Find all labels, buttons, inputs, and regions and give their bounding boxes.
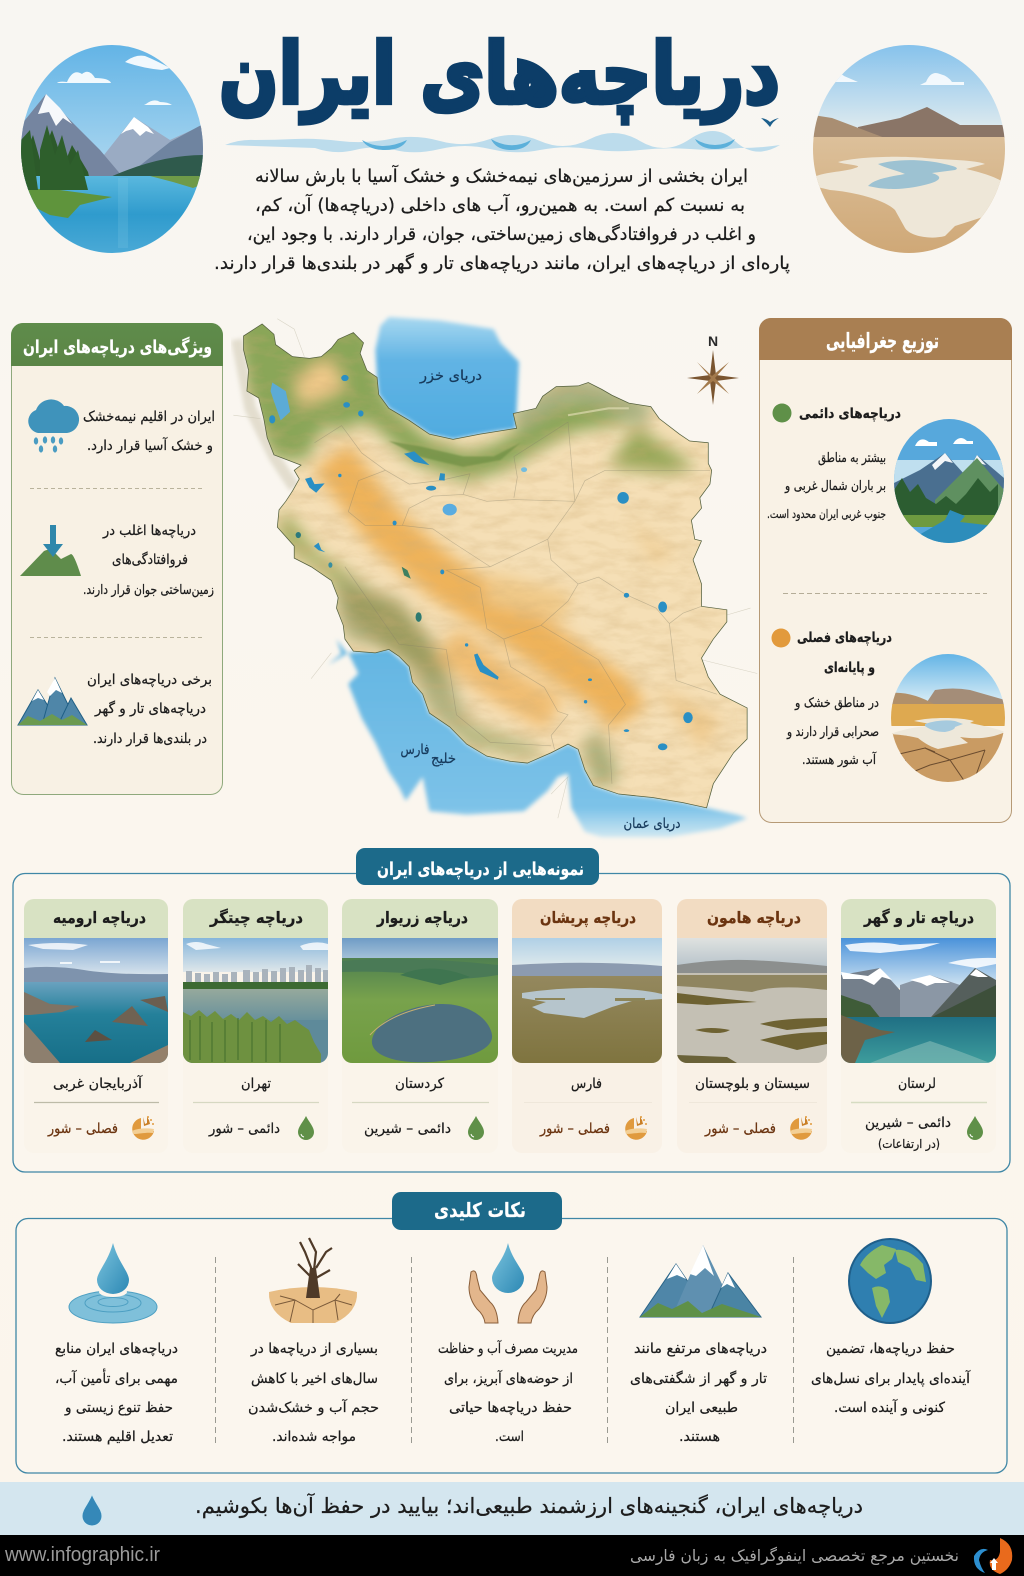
title: دریاچه‌های ایران xyxy=(219,25,780,124)
legend: permanent lakes: دریاچه‌های دائمی xyxy=(799,406,901,422)
card: Chitgar: دریاچه چیتگر xyxy=(209,908,303,928)
key point: sustainable future: حفظ دریاچه‌ها، تضمین xyxy=(826,1341,955,1357)
card: Chitgar: دائمی – شور xyxy=(208,1121,280,1137)
card: Tar and Gahar: دائمی – شیرین xyxy=(865,1115,951,1131)
icon: compass rose xyxy=(687,333,739,405)
card: Hamoon: دریاچه هامون xyxy=(707,908,801,928)
key point: water resources xyxy=(55,1243,178,1445)
key point: shrinking lakes: مواجه شده‌اند. xyxy=(272,1429,356,1445)
text: tectonic xyxy=(83,523,214,598)
intro paragraph: و اغلب در فروافتادگی‌های زمین‌ساختی، جوان، قرار دارند. با وجود این، xyxy=(247,223,756,245)
key point: sustainable future: کنونی و آینده است. xyxy=(834,1399,945,1416)
text: permanent lakes: بر باران شمال غربی و xyxy=(784,479,886,494)
key point: highland lakes: تار و گهر از شگفتی‌های xyxy=(630,1370,767,1387)
illustration: seasonal lake xyxy=(891,654,1005,782)
Persian Gulf and Sea of Oman xyxy=(328,639,747,837)
footer tagline: نخستین مرجع تخصصی اینفوگرافیک به زبان فارسی xyxy=(630,1546,959,1566)
card: Zarivar: دائمی – شیرین xyxy=(364,1121,451,1137)
key point: water management: مدیریت مصرف آب و حفاظت xyxy=(438,1340,578,1357)
text: seasonal lakes: صحرابی قرار دارند و xyxy=(786,725,879,740)
intro paragraph: پاره‌ای از دریاچه‌های ایران، مانند دریاچه‌های تار و گهر در بلندی‌ها قرار دارند. xyxy=(214,252,790,274)
closing banner xyxy=(0,1482,1024,1535)
country border xyxy=(244,324,747,808)
key point: water management: حفظ دریاچه‌ها حیاتی xyxy=(449,1400,572,1416)
section heading: key points: نکات کلیدی xyxy=(434,1198,526,1222)
icon: mountains xyxy=(18,678,87,725)
text: seasonal lakes: در مناطق خشک و xyxy=(794,696,879,711)
icon: dead tree on cracked ground xyxy=(269,1238,357,1323)
key point: sustainable future xyxy=(811,1239,971,1416)
panel: geographic distribution xyxy=(759,318,1012,822)
card: Urmia: فصلی – شور xyxy=(47,1121,118,1137)
legend: permanent lakes xyxy=(772,404,901,422)
text: highlands: برخی دریاچه‌های ایران xyxy=(87,672,212,688)
key point: shrinking lakes: سال‌های اخیر با کاهش xyxy=(251,1371,378,1387)
key point: water management xyxy=(438,1243,578,1445)
footer website: www.infographic.ir xyxy=(4,1544,160,1566)
text: tectonic: زمین‌ساختی جوان قرار دارند. xyxy=(83,583,214,598)
card: Tar and Gahar: لرستان xyxy=(898,1076,936,1092)
card: Parishan xyxy=(512,899,662,1153)
legend: seasonal lakes: دریاچه‌های فصلی xyxy=(797,630,892,646)
decorative wave under title xyxy=(225,131,780,152)
map of Iran xyxy=(230,305,771,856)
key point: water resources: تعدیل اقلیم هستند. xyxy=(62,1429,173,1445)
illustration: permanent lake xyxy=(894,419,1004,543)
card: Hamoon xyxy=(677,899,827,1153)
icon: earth globe xyxy=(849,1239,931,1323)
icon: rain cloud xyxy=(28,399,79,453)
illustration: dry salt lake xyxy=(813,45,1005,253)
key point: water management: از حوضه‌های آبریز، برای xyxy=(444,1370,573,1387)
text: climate: ایران در اقلیم نیمه‌خشک xyxy=(83,409,215,425)
intro paragraph: ایران بخشی از سرزمین‌های نیمه‌خشک و خشک آسیا با بارش سالانه xyxy=(255,164,748,187)
text: highlands: در بلندی‌ها قرار دارند. xyxy=(93,731,207,747)
section heading: lake examples: نمونه‌هایی از دریاچه‌های ایران xyxy=(377,859,584,880)
footer logo xyxy=(974,1538,1012,1574)
card: Parishan: دریاچه پریشان xyxy=(540,908,636,928)
text: climate xyxy=(83,409,215,454)
card: Hamoon: سیستان و بلوچستان xyxy=(695,1076,810,1092)
text: highlands: دریاچه‌های تار و گهر xyxy=(94,700,206,717)
intro paragraph: به نسبت کم است. به همین‌رو، آب های داخلی (دریاچه‌ها) آن، کم، xyxy=(255,193,745,216)
icon: hands holding drop xyxy=(469,1243,547,1323)
text: seasonal lakes xyxy=(786,696,879,768)
map label: Caspian Sea: دریای خزر xyxy=(419,368,482,384)
icon: depression arrow xyxy=(20,525,81,576)
icon: compass rose: N xyxy=(708,333,718,349)
text: permanent lakes: جنوب غربی ایران محدود است. xyxy=(767,507,886,522)
illustration: mountain lake xyxy=(21,45,203,253)
card: Parishan: فارس xyxy=(571,1076,602,1092)
icon: drop with ripples xyxy=(69,1243,157,1323)
key point: shrinking lakes: حجم آب و خشک‌شدن xyxy=(248,1399,379,1416)
section heading: lake examples xyxy=(356,848,599,885)
panel header: lake features xyxy=(11,323,223,366)
lakes xyxy=(269,375,693,750)
panel header: geographic distribution xyxy=(759,318,1012,360)
footer bar xyxy=(0,1535,1024,1576)
panel header: lake features: ویژگی‌های دریاچه‌های ایران xyxy=(23,336,212,358)
key point: water management: است. xyxy=(495,1429,524,1445)
key point: sustainable future: آینده‌ای پایدار برای نسل‌های xyxy=(811,1370,971,1387)
section frame: lake examples xyxy=(13,848,1010,1172)
card: Tar and Gahar: (در ارتفاعات) xyxy=(878,1137,940,1152)
key point: highland lakes: دریاچه‌های مرتفع مانند xyxy=(634,1341,767,1357)
map label: Sea of Oman: دریای عمان xyxy=(624,816,680,832)
map label: Persian Gulf, Khalij: خلیج xyxy=(431,751,456,767)
card: Parishan: فصلی – شور xyxy=(539,1121,610,1137)
legend: seasonal lakes: و پایانه‌ای xyxy=(824,660,875,676)
icon: water drop xyxy=(82,1494,102,1526)
icon: snowy mountains xyxy=(640,1245,761,1317)
intro paragraph xyxy=(214,164,790,274)
panel header: geographic distribution: توزیع جغرافیایی xyxy=(826,329,939,353)
card: Zarivar: کردستان xyxy=(395,1076,444,1092)
section frame: key points xyxy=(16,1192,1007,1473)
key point: highland lakes: هستند. xyxy=(679,1429,720,1445)
text: highlands xyxy=(87,672,212,747)
key point: highland lakes xyxy=(630,1245,767,1445)
icon: bird xyxy=(761,118,779,127)
card: Chitgar: تهران xyxy=(241,1076,271,1092)
map label: Persian Gulf, Fars: فارس xyxy=(400,742,430,758)
card: Urmia: آذربایجان غربی xyxy=(53,1075,143,1092)
key point: water resources: حفظ تنوع زیستی و xyxy=(64,1400,173,1416)
Caspian Sea xyxy=(375,317,519,439)
key point: water resources: مهمی برای تأمین آب، xyxy=(55,1368,178,1387)
text: climate: و خشک آسیا قرار دارد. xyxy=(87,437,213,454)
text: permanent lakes: بیشتر به مناطق xyxy=(818,451,886,466)
card: Urmia xyxy=(24,899,168,1153)
key point: shrinking lakes xyxy=(248,1238,379,1445)
card: Tar and Gahar: دریاچه تار و گهر xyxy=(863,908,974,928)
card: Urmia: دریاچه ارومیه xyxy=(53,908,146,928)
section heading: key points xyxy=(392,1192,562,1230)
card: Tar and Gahar xyxy=(841,899,996,1153)
card: Chitgar xyxy=(183,899,328,1153)
card: Zarivar: دریاچه زریوار xyxy=(376,908,468,928)
panel: lake features xyxy=(11,323,223,794)
key point: water resources: دریاچه‌های ایران منابع xyxy=(55,1341,178,1357)
text: seasonal lakes: آب شور هستند. xyxy=(802,751,877,768)
terrain xyxy=(244,324,747,808)
closing banner: دریاچه‌های ایران، گنجینه‌های ارزشمند طبیعی‌اند؛ بیایید در حفظ آن‌ها بکوشیم. xyxy=(195,1493,863,1519)
text: permanent lakes xyxy=(767,451,886,522)
text: tectonic: دریاچه‌ها اغلب در xyxy=(102,523,196,539)
legend: seasonal lakes xyxy=(772,628,892,676)
text: tectonic: فروافتادگی‌های xyxy=(112,551,188,568)
card: Hamoon: فصلی – شور xyxy=(704,1121,776,1137)
key point: highland lakes: طبیعی ایران xyxy=(665,1400,738,1416)
card: Zarivar xyxy=(342,899,498,1153)
key point: shrinking lakes: بسیاری از دریاچه‌ها در xyxy=(250,1341,378,1357)
